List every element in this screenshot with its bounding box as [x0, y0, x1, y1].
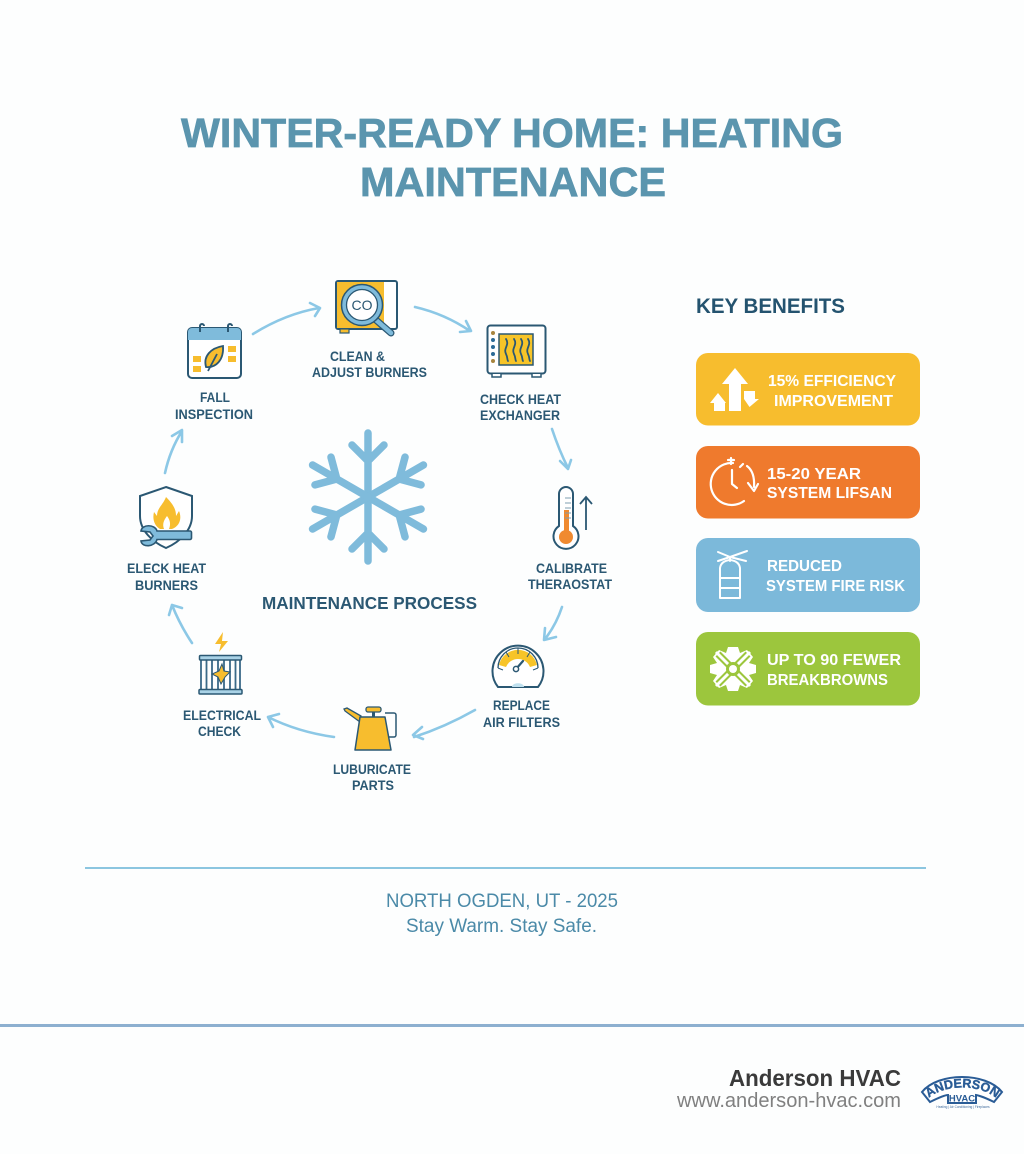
panel: key benefits: [696, 295, 920, 706]
card: lifespan: SYSTEM LIFSAN: [767, 485, 892, 502]
card: fire risk: REDUCED: [767, 558, 842, 575]
step: fall inspection: INSPECTION: [175, 407, 253, 422]
step: replace air filters: AIR FILTERS: [483, 715, 560, 730]
step: fall inspection: FALL: [200, 390, 230, 405]
card: efficiency: 15% EFFICIENCY: [768, 373, 896, 390]
step: lubricate parts: LUBURICATE: [333, 762, 411, 777]
step: clean and adjust burners: CLEAN &: [330, 349, 385, 364]
step: lubricate parts: PARTS: [352, 778, 394, 793]
icon: Anderson HVAC logo: ANDERSON: [926, 1078, 1000, 1098]
icon: Anderson HVAC logo: [920, 1076, 1004, 1109]
card: efficiency: [696, 353, 920, 426]
arrows: cycle connectors: [165, 303, 571, 739]
step: electrical check: CHECK: [198, 724, 241, 739]
heading: maintenance process: MAINTENANCE PROCESS: [262, 593, 477, 613]
step: lubricate parts: [333, 707, 411, 793]
step: electrical check: ELECTRICAL: [183, 708, 261, 723]
text block: location and tagline: Stay Warm. Stay Safe.: [406, 916, 597, 937]
card: fire risk: [696, 538, 920, 612]
step: check heat exchanger: CHECK HEAT: [480, 392, 562, 407]
footer: company name and website: www.anderson-hvac.com: [676, 1090, 901, 1112]
text block: location and tagline: [386, 891, 618, 937]
step: check heat burners: BURNERS: [135, 578, 198, 593]
card: breakdowns: UP TO 90 FEWER: [767, 652, 901, 669]
step: clean and adjust burners: CO: [352, 297, 373, 313]
title: WINTER-READY HOME: HEATING: [181, 110, 843, 156]
card: efficiency: IMPROVEMENT: [774, 393, 893, 410]
step: calibrate thermostat: CALIBRATE: [536, 561, 607, 576]
step: check heat exchanger: [480, 326, 562, 423]
step: replace air filters: REPLACE: [493, 698, 550, 713]
icon: Anderson HVAC logo: HVAC: [949, 1094, 975, 1104]
step: check heat exchanger: EXCHANGER: [480, 408, 560, 423]
icon: Anderson HVAC logo: Heating | Air Conditioning | Fireplaces: [936, 1105, 990, 1109]
card: breakdowns: [696, 632, 920, 706]
text block: location and tagline: NORTH OGDEN, UT - 2025: [386, 891, 618, 912]
title: MAINTENANCE: [360, 159, 666, 205]
footer: company name and website: Anderson HVAC: [729, 1065, 901, 1091]
step: replace air filters: [483, 646, 560, 730]
step: check heat burners: [127, 487, 207, 593]
footer: company name and website: [676, 1065, 901, 1112]
icon: snowflake: [305, 433, 431, 561]
card: lifespan: [696, 446, 920, 518]
step: calibrate thermostat: [528, 487, 613, 592]
heading: key benefits: KEY BENEFITS: [696, 295, 845, 318]
step: electrical check: [183, 632, 261, 739]
step: fall inspection: [175, 324, 253, 422]
step: clean and adjust burners: ADJUST BURNERS: [312, 365, 427, 380]
step: calibrate thermostat: THERAOSTAT: [528, 577, 613, 592]
card: lifespan: 15-20 YEAR: [767, 466, 861, 483]
step: check heat burners: ELECK HEAT: [127, 561, 207, 576]
panel: maintenance cycle: [127, 281, 613, 793]
title: [181, 110, 843, 205]
step: clean and adjust burners: [312, 281, 427, 380]
card: fire risk: SYSTEM FIRE RISK: [766, 578, 905, 595]
card: breakdowns: BREAKBROWNS: [767, 672, 888, 689]
